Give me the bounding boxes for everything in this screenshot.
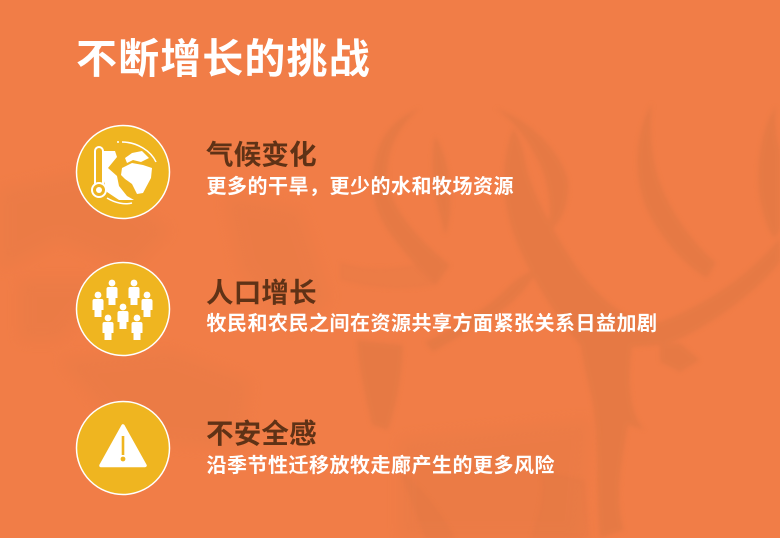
icon: warning triangle	[76, 400, 170, 496]
heading: climate change: 气候变化	[206, 139, 317, 170]
text: climate change detail: 更多的干旱，更少的水和牧场资源	[206, 176, 514, 198]
title: 不断增长的挑战	[76, 36, 371, 82]
heading: insecurity: 不安全感	[206, 418, 317, 449]
icon: climate globe and thermometer	[76, 124, 170, 220]
text: population growth detail: 牧民和农民之间在资源共享方面紧张关系日益加剧	[206, 313, 658, 335]
text: insecurity detail: 沿季节性迁移放牧走廊产生的更多风险	[206, 455, 555, 477]
icon: group of people	[76, 262, 170, 356]
heading: population growth: 人口增长	[206, 277, 317, 308]
